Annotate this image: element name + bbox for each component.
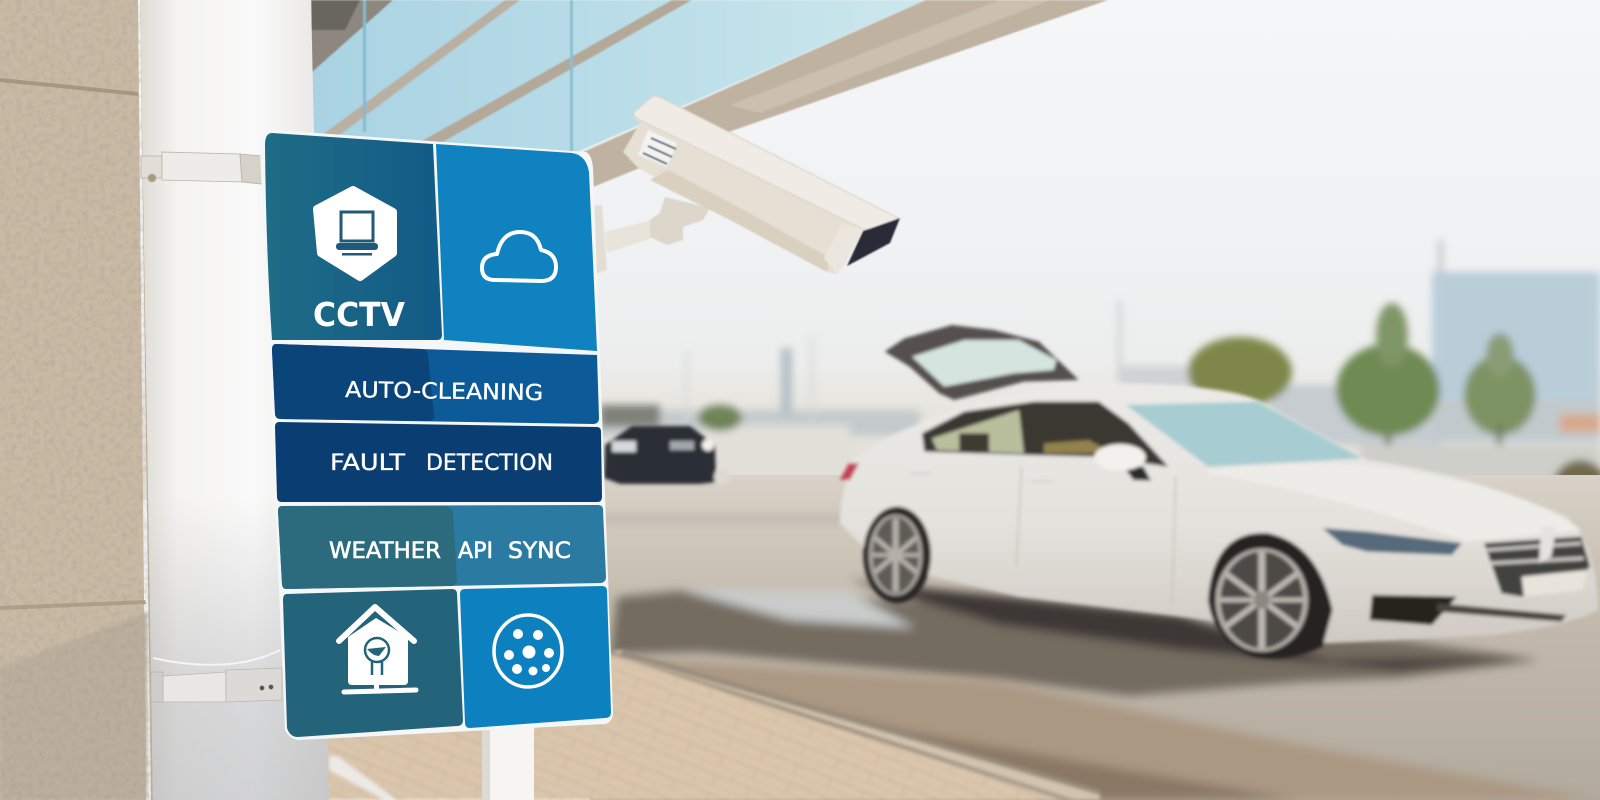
camera lens opening — [847, 218, 900, 266]
panel: cloud — [436, 144, 597, 351]
car windshield — [1126, 402, 1362, 467]
background: building with glass facade — [311, 0, 1108, 187]
panel: weather API sync — [278, 505, 606, 589]
car headlight — [1322, 528, 1462, 555]
label: auto-cleaning: AUTO-CLEANING — [345, 378, 543, 406]
background: sky — [0, 0, 1600, 500]
icon: cloud — [482, 232, 556, 281]
car fog light — [1370, 595, 1566, 625]
camera front ring — [824, 223, 863, 274]
road shadow and wet patch — [600, 515, 1540, 696]
camera arm — [605, 197, 710, 253]
car body — [840, 383, 1599, 643]
panel: fault detection — [275, 422, 602, 502]
background: distant skyline, trees and lamp posts — [590, 240, 1600, 520]
car rear wheel — [863, 507, 931, 603]
panel: home icon — [283, 589, 463, 737]
panel: CCTV — [265, 133, 442, 340]
car tail light — [840, 463, 859, 480]
icon: house with camera — [339, 607, 416, 692]
label: fault detection: DETECTION — [426, 451, 553, 476]
car hood highlight — [1208, 464, 1581, 542]
dirt strip — [612, 657, 1600, 800]
car mirror — [1094, 444, 1151, 481]
label: weather API sync: SYNC — [508, 539, 571, 564]
camera body — [623, 116, 863, 274]
car side windows — [922, 402, 1168, 467]
lower pole bracket — [151, 650, 282, 702]
background: brick pavement and curb — [325, 650, 1100, 800]
heading: CCTV: CCTV — [313, 295, 405, 334]
upper pole bracket — [141, 152, 262, 184]
sign support post — [482, 722, 534, 800]
label: weather API sync: WEATHER — [329, 539, 441, 564]
lamp pole — [140, 0, 329, 800]
icon: laptop in hexagon — [317, 190, 393, 277]
car open trunk lid — [885, 325, 1079, 400]
label: weather API sync: API — [458, 539, 493, 564]
background: ground and road — [590, 475, 1600, 800]
camera label — [638, 130, 677, 167]
sign white backing — [260, 130, 613, 740]
camera hood — [633, 96, 898, 230]
panel: auto-cleaning — [272, 344, 599, 424]
label: fault detection: FAULT — [330, 451, 406, 476]
camera mount plate — [592, 205, 607, 274]
panel: dots icon — [460, 586, 611, 728]
white car with open trunk — [840, 325, 1599, 659]
car grille and plate — [1484, 527, 1590, 597]
security camera — [592, 96, 900, 274]
background car: blurred dark car — [604, 426, 730, 485]
car front wheel — [1208, 533, 1332, 659]
icon: circle of dots — [494, 615, 562, 687]
information sign — [260, 130, 613, 740]
car door lines — [910, 467, 1176, 603]
wall: stone building corner — [0, 0, 155, 800]
